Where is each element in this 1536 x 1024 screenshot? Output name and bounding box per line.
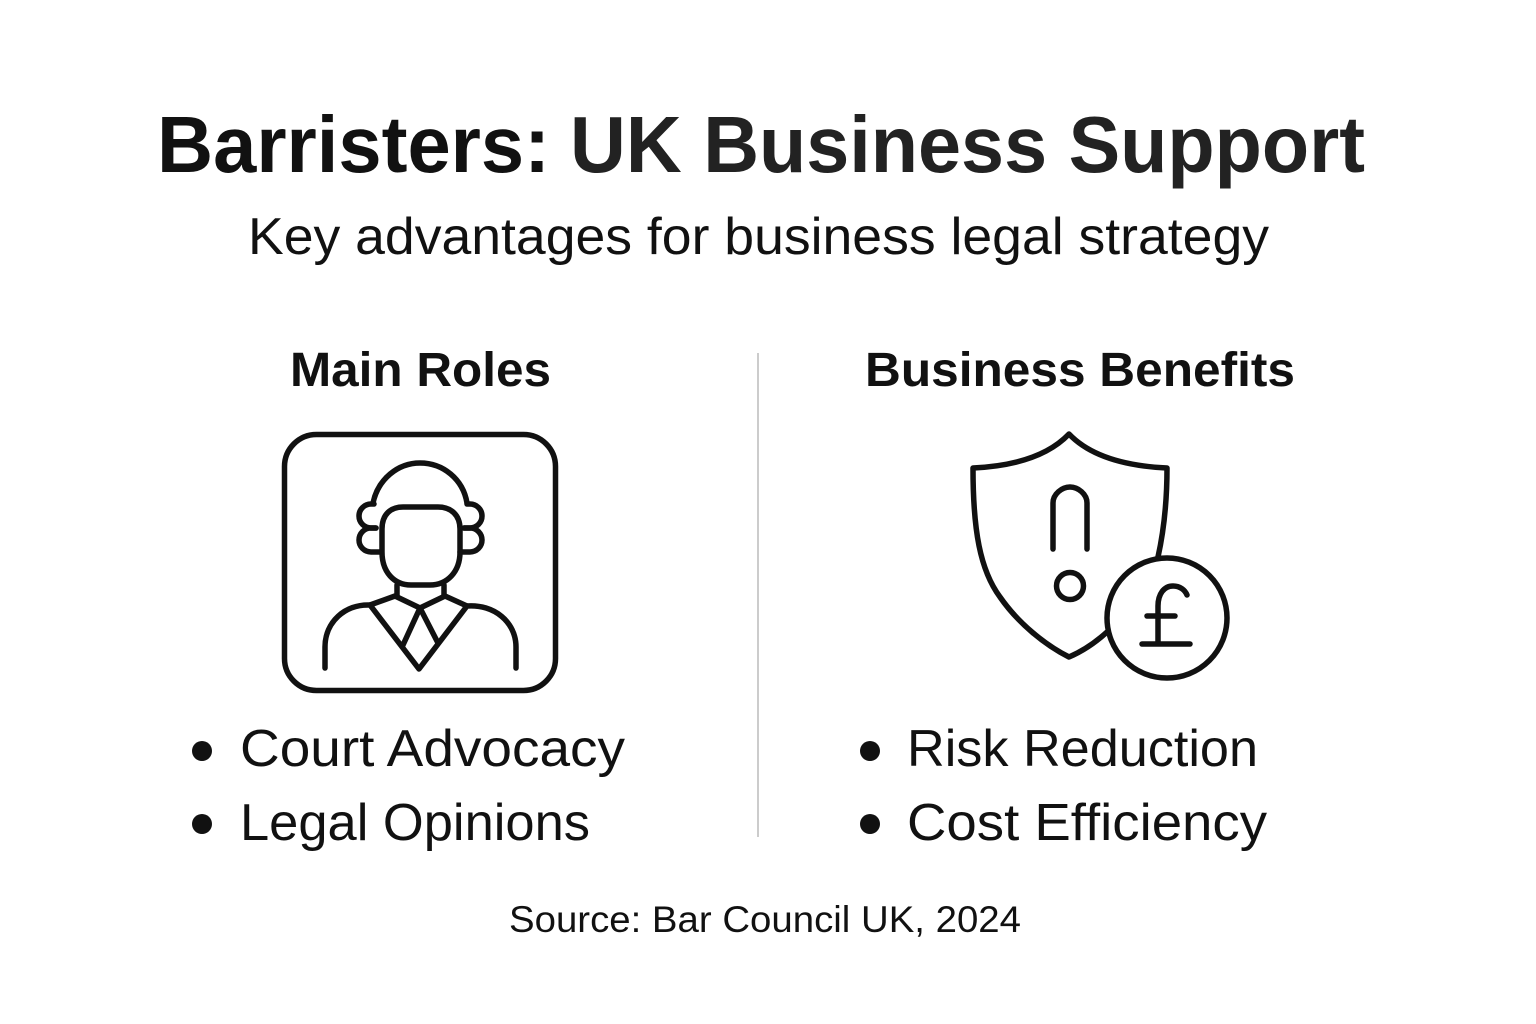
heading: main roles: Main Roles <box>290 344 551 397</box>
bullet list: roles: Legal Opinions <box>240 794 590 852</box>
bullet list: benefits: Cost Efficiency <box>907 794 1267 852</box>
panel: business benefits <box>860 344 1295 852</box>
title: Barristers: <box>157 100 550 189</box>
subtitle: Key advantages for business legal strategy <box>248 208 1269 266</box>
icon: barrister in wig <box>284 434 556 690</box>
icon: shield with pound <box>973 434 1227 678</box>
bullet list: benefits: Risk Reduction <box>907 720 1258 778</box>
bullet list: roles <box>192 720 625 852</box>
heading: business benefits: Business Benefits <box>865 344 1295 397</box>
bullet list: roles: Court Advocacy <box>240 720 625 778</box>
panel: main roles <box>192 344 625 852</box>
source note: Source: Bar Council UK, 2024 <box>509 899 1021 940</box>
bullet list: benefits <box>860 720 1267 852</box>
title <box>157 100 1365 189</box>
title: UK Business Support <box>570 100 1365 189</box>
